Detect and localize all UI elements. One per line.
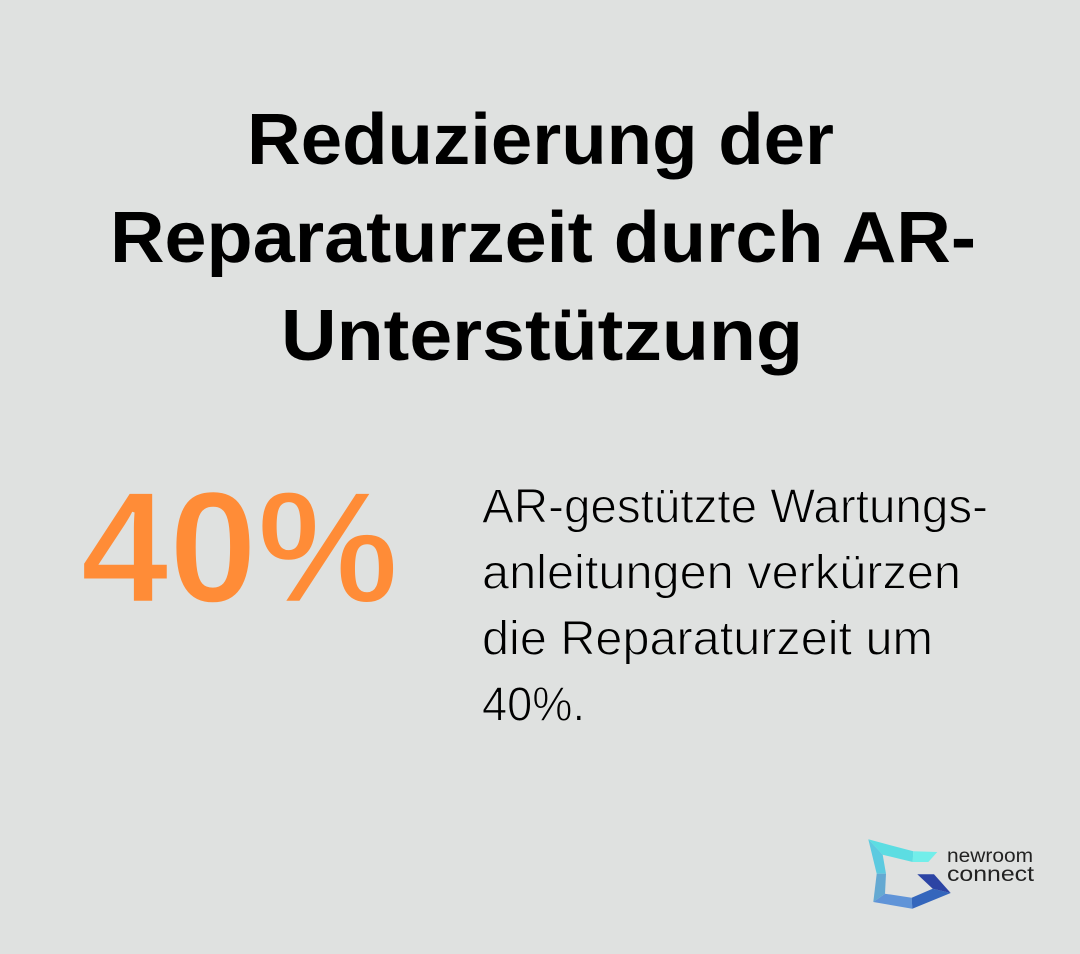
logo wordmark xyxy=(947,845,1034,886)
logo: newroom connect xyxy=(868,839,1034,909)
description text: 40%. xyxy=(482,678,585,732)
logo wordmark: newroom xyxy=(947,845,1033,867)
title: Reduzierung der xyxy=(247,100,834,180)
title xyxy=(110,100,976,376)
description text: die Reparaturzeit um xyxy=(482,612,933,666)
description text: AR-gestützte Wartungs- xyxy=(482,480,988,534)
big stat: 40%: 40% xyxy=(80,458,398,636)
description text: anleitungen verkürzen xyxy=(482,546,961,600)
title: Reparaturzeit durch AR- xyxy=(110,198,976,278)
icon: logo mark xyxy=(868,839,951,909)
description text xyxy=(482,480,988,732)
title: Unterstützung xyxy=(281,296,803,376)
logo wordmark: connect xyxy=(947,863,1034,886)
